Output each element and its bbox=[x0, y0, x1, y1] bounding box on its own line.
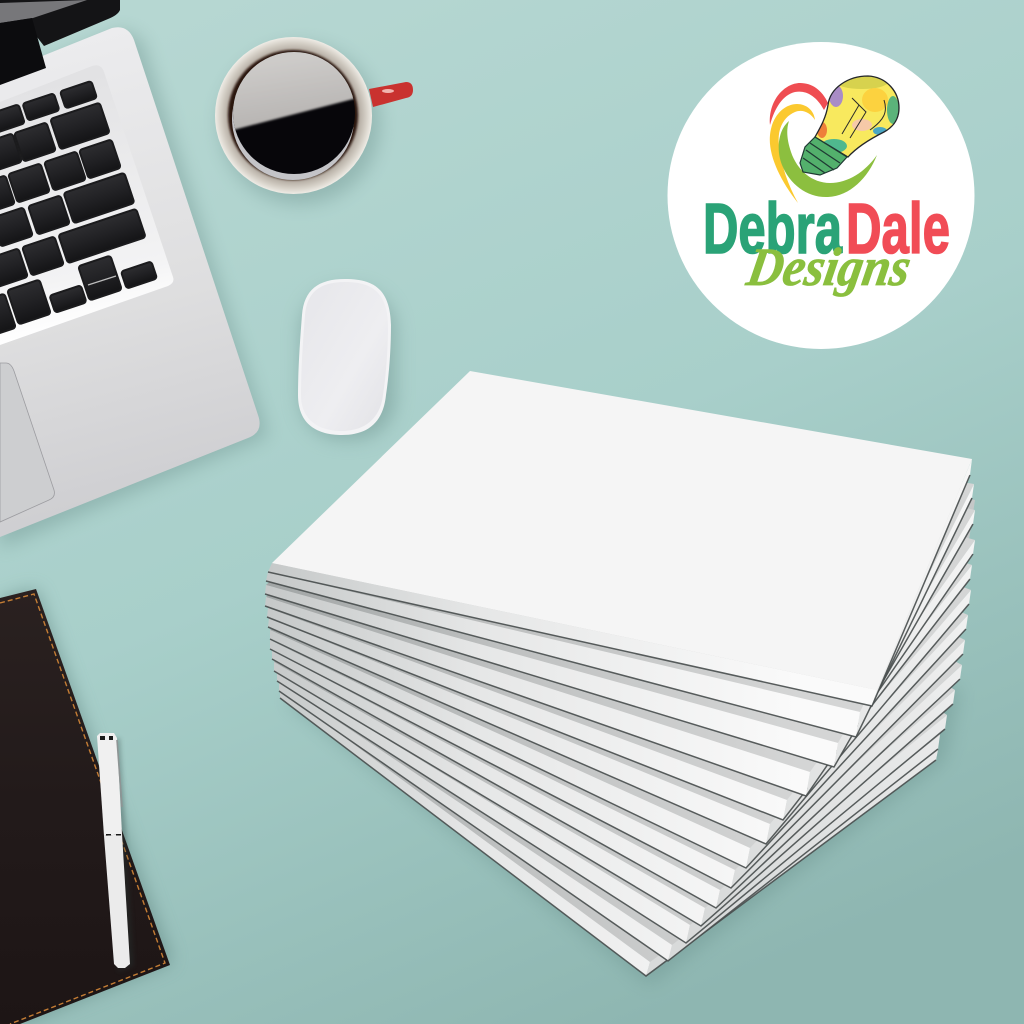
leather notebook bbox=[0, 589, 172, 1024]
logo script: Designs bbox=[742, 237, 915, 297]
bulb base bbox=[800, 137, 847, 175]
notebook cover bbox=[0, 589, 170, 1024]
pen clip bbox=[117, 740, 122, 807]
logo wordmark: Dale bbox=[846, 190, 950, 269]
coffee bbox=[228, 50, 358, 180]
mouse surface bbox=[301, 282, 388, 431]
mug handle bbox=[369, 82, 413, 107]
laptop screen edge bbox=[0, 0, 120, 46]
sheets bbox=[265, 400, 975, 976]
logo circle bbox=[668, 42, 974, 349]
laptop bbox=[0, 0, 268, 548]
coffee reflection bbox=[233, 52, 355, 174]
trackpad bbox=[0, 363, 54, 522]
white pen bbox=[97, 733, 134, 972]
laptop body bbox=[0, 27, 260, 537]
mug rim bbox=[215, 37, 372, 194]
pen cap bbox=[97, 733, 122, 836]
stitching bbox=[0, 594, 165, 1024]
logo wordmark: Debra bbox=[703, 190, 842, 269]
laptop screen glare bbox=[0, 0, 87, 23]
keyboard well bbox=[0, 65, 173, 345]
logo swooshes bbox=[770, 83, 877, 203]
mouse bbox=[298, 279, 396, 440]
coffee mug bbox=[215, 37, 413, 204]
paper stack bbox=[265, 371, 975, 985]
light bulb icon bbox=[800, 75, 899, 175]
pen body bbox=[104, 834, 130, 968]
handle highlight bbox=[382, 89, 394, 93]
keyboard keys bbox=[0, 81, 157, 338]
stack shadow bbox=[285, 600, 960, 985]
logo badge bbox=[668, 42, 974, 349]
top sheet bbox=[272, 371, 972, 690]
laptop hinge bbox=[0, 18, 46, 85]
coffee light crescent bbox=[232, 58, 354, 180]
pen marks bbox=[100, 736, 121, 836]
